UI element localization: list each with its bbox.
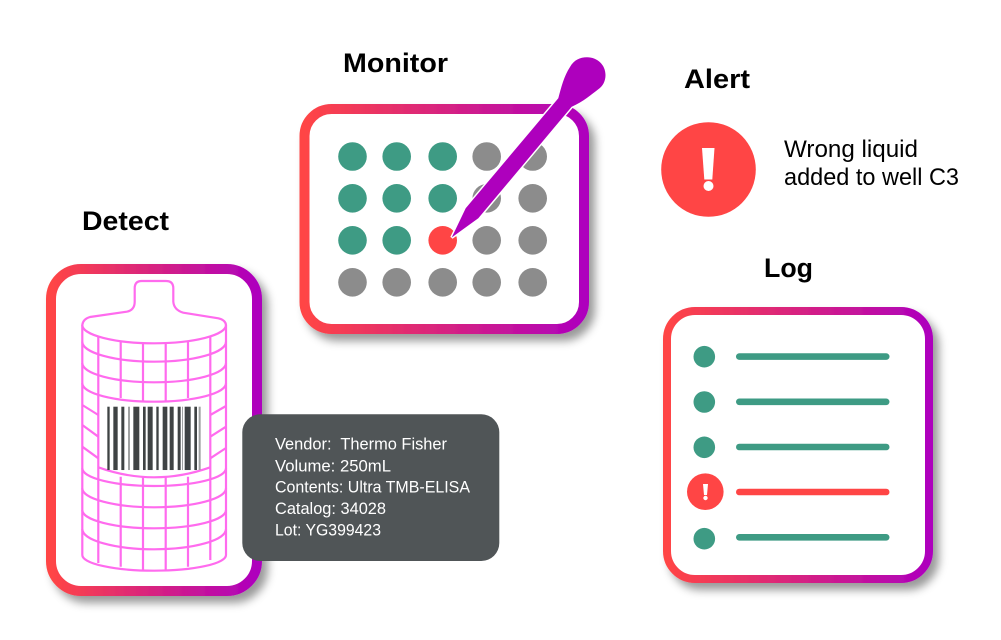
- callout text: Catalog: 34028: [275, 499, 386, 518]
- alert message: [784, 136, 959, 191]
- alert message: added to well C3: [784, 164, 959, 191]
- panel: log card: [667, 311, 929, 579]
- barcode: [107, 407, 201, 470]
- callout text: Vendor: Thermo Fisher: [275, 434, 447, 454]
- panel: detect card: [51, 269, 257, 591]
- callout text: Lot: YG399423: [275, 520, 381, 540]
- alert message: Wrong liquid: [784, 136, 918, 163]
- log entries: [687, 346, 890, 550]
- callout text: Contents: Ultra TMB-ELISA: [275, 478, 471, 496]
- heading: Log: Log: [764, 253, 813, 283]
- heading: Alert: Alert: [684, 64, 750, 94]
- callout text: [275, 434, 471, 540]
- well plate dots: [338, 142, 547, 297]
- callout text: Volume: 250mL: [275, 456, 391, 476]
- icon: alert circle: [661, 122, 756, 217]
- heading: Detect: Detect: [82, 206, 169, 236]
- heading: Monitor: Monitor: [343, 48, 449, 78]
- panel: monitor card: [304, 109, 584, 329]
- icon: pipette: [452, 57, 606, 237]
- callout: bottle details: [242, 414, 499, 561]
- icon: reagent bottle wireframe: [82, 281, 226, 571]
